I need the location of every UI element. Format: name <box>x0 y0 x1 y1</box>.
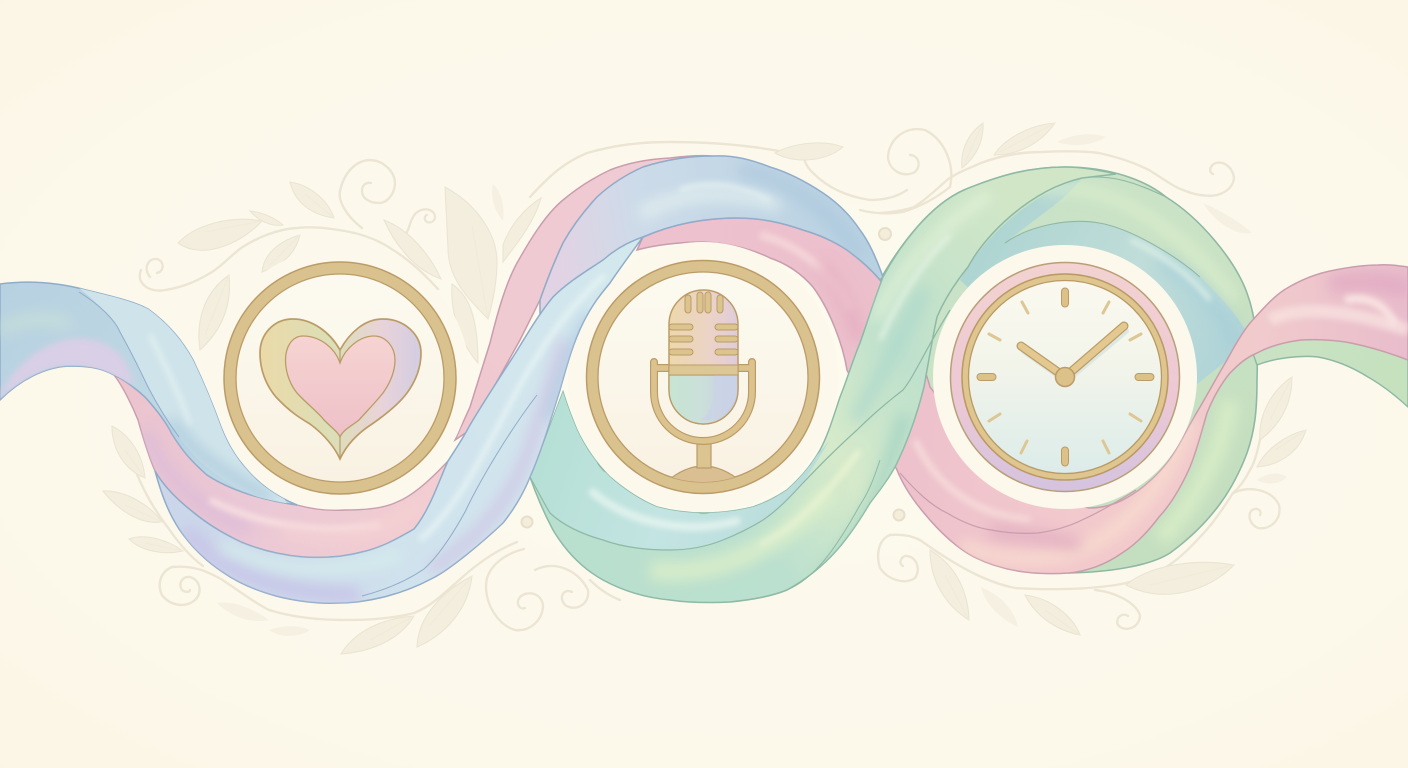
decorative dots <box>522 228 904 528</box>
ribbon: green and teal S-strand <box>530 167 1116 603</box>
ribbon: blue and pink upper arc <box>455 156 883 440</box>
floral ornament: lower right <box>878 377 1306 635</box>
cream disc behind microphone <box>568 242 838 512</box>
icon: microphone in gold ring <box>586 260 820 494</box>
ribbon: pink central arc and right tail <box>637 218 1408 574</box>
ribbon: left blue strand <box>0 282 297 510</box>
cream disc behind clock <box>933 245 1197 509</box>
floral ornament: lower left <box>103 426 620 654</box>
floral ornament: top centre and right <box>530 123 1252 233</box>
icon: clock <box>950 262 1180 492</box>
ribbon: left pink strand <box>114 375 470 557</box>
ribbon: large blue crossing strand <box>155 237 643 603</box>
cream disc behind heart <box>210 248 470 508</box>
ribbon: right green tail <box>1250 338 1408 407</box>
illustration canvas <box>0 122 1408 654</box>
icon: heart in gold ring <box>224 262 456 494</box>
floral ornament: upper left <box>140 160 541 363</box>
ribbon: green arc around clock <box>880 167 1257 573</box>
